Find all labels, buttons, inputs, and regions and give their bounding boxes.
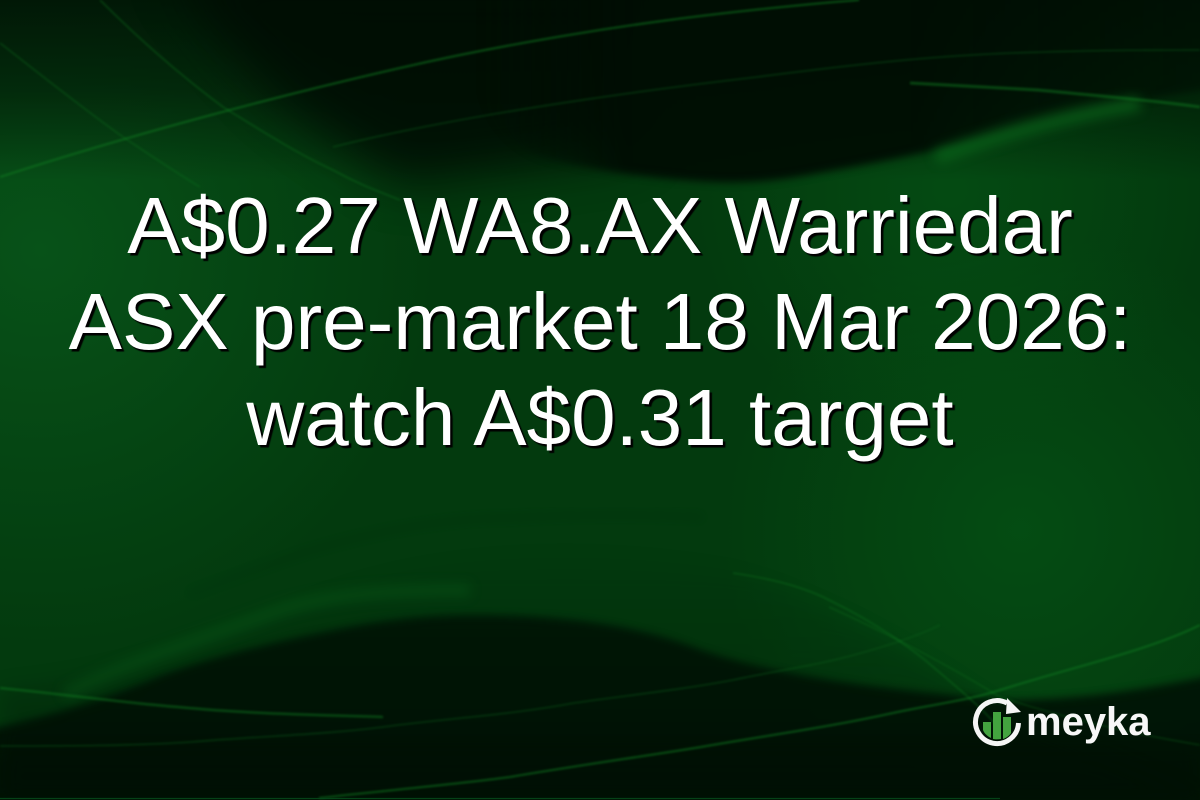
title: ASX pre-market 18 Mar 2026:: [69, 277, 1131, 366]
title: A$0.27 WA8.AX Warriedar: [127, 181, 1073, 270]
icon: circular arrow with bars: [976, 698, 1021, 744]
title: [68, 181, 1131, 464]
logo: meyka: [972, 698, 1151, 746]
bottom dark regions: [0, 615, 1200, 800]
title: watch A$0.31 target: [246, 373, 954, 462]
wordmark: meyka: [1026, 700, 1151, 744]
top dark region: [0, 0, 1200, 180]
